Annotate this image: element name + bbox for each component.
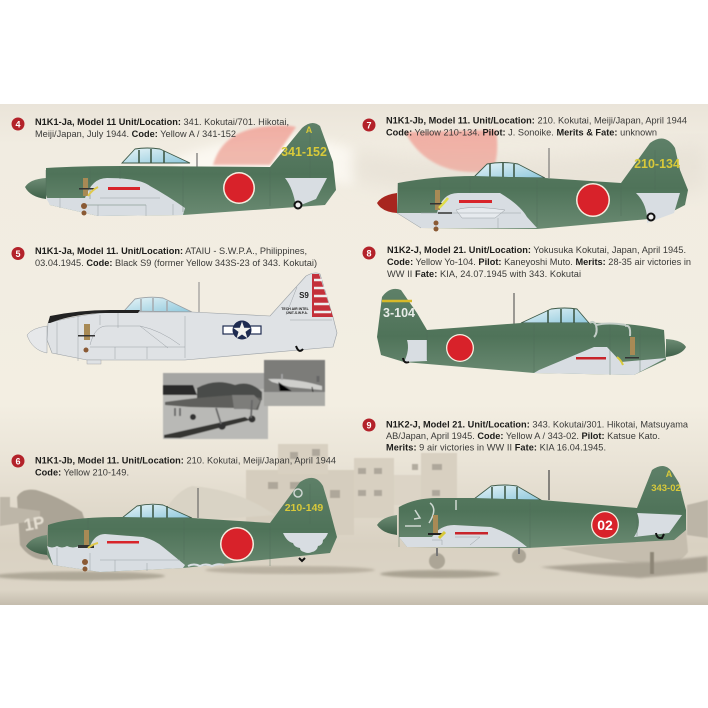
caption 5: N1K1-Ja, Model 11. Unit/Location: ATAIU - S.W.P.A., Philippines,: [35, 246, 307, 256]
entry 7: [362, 116, 688, 232]
badge 5: 5: [15, 249, 21, 259]
badge 5: [12, 247, 24, 260]
aircraft 9: [377, 466, 686, 556]
entry 6: [12, 454, 337, 572]
caption 4: N1K1-Ja, Model 11 Unit/Location: 341. Kokutai/701. Hikotai,: [35, 117, 289, 127]
badge 7: 7: [366, 120, 372, 130]
badge 8: [362, 246, 376, 260]
photo: captured aircraft close-up: [163, 373, 268, 439]
tail marking S9: S9: [299, 291, 309, 300]
caption 6: Code: Yellow 210-149.: [35, 468, 129, 478]
caption 9: Merits: 9 air victories in WW II Fate: KIA 16.04.1945.: [386, 442, 606, 452]
badge 9: [362, 418, 376, 432]
background panel: [0, 104, 708, 605]
photo: captured aircraft distance view: [264, 360, 325, 406]
caption 9: N1K2-J, Model 21. Unit/Location: 343. Kokutai/301. Hikotai, Matsuyama: [386, 420, 688, 430]
aircraft 4: [25, 123, 336, 216]
background photograph: airfield and buildings: 1P: [22, 513, 46, 535]
badge 6: 6: [15, 456, 21, 466]
entry 9: [362, 418, 689, 556]
background photograph: airfield and buildings: [0, 444, 708, 580]
tail code: 343-02: [651, 483, 681, 494]
flag sun: plane 4: [213, 126, 296, 165]
aircraft 7: [377, 139, 688, 232]
entry 8: [362, 245, 691, 375]
aircraft 8: [377, 289, 686, 375]
US national insignia: [223, 320, 261, 340]
tail code: 210-134: [634, 157, 680, 171]
aircraft 5: [27, 273, 337, 364]
aircraft 5: UNIT-S.W.P.A.: [286, 311, 308, 315]
tail code: 210-149: [285, 502, 323, 514]
badge 4: 4: [15, 119, 21, 129]
aircraft 4: A: [306, 125, 313, 135]
caption 8: WW II Fate: KIA, 24.07.1945 with 343. Kokutai: [387, 269, 581, 279]
badge 8: 8: [366, 248, 372, 258]
fuselage number: 02: [597, 517, 613, 533]
entry 5: [12, 246, 337, 364]
flag sun: plane 7: [405, 130, 497, 172]
caption 9: AB/Japan, April 1945. Code: Yellow A / 343-02. Pilot: Katsue Kato.: [386, 431, 660, 441]
caption 8: N1K2-J, Model 21. Unit/Location: Yokusuka Kokutai, Japan, April 1945.: [387, 245, 686, 255]
aircraft 6: [26, 478, 337, 572]
tail marking tech air intel: TECH AIR INTEL: [281, 307, 310, 311]
aircraft 9: A: [666, 469, 673, 479]
caption 7: N1K1-Jb, Model 11. Unit/Location: 210. Kokutai, Meiji/Japan, April 1944: [386, 116, 687, 126]
caption 7: Code: Yellow 210-134. Pilot: J. Sonoike. Merits & Fate: unknown: [386, 128, 657, 138]
badge 9: 9: [366, 420, 372, 430]
badge 7: [362, 118, 376, 132]
entry 4: [12, 117, 336, 216]
badge 6: [12, 454, 24, 468]
tail code: 341-152: [281, 145, 327, 159]
tail code: 3-104: [383, 306, 415, 320]
caption 4: Meiji/Japan, July 1944. Code: Yellow A / 341-152: [35, 129, 236, 139]
badge 4: [12, 118, 24, 130]
caption 6: N1K1-Jb, Model 11. Unit/Location: 210. Kokutai, Meiji/Japan, April 1944: [35, 456, 336, 466]
caption 8: Code: Yellow Yo-104. Pilot: Kaneyoshi Muto. Merits: 28-35 air victories in: [387, 257, 691, 267]
caption 5: 03.04.1945. Code: Black S9 (former Yellow 343S-23 of 343. Kokutai): [35, 258, 317, 268]
